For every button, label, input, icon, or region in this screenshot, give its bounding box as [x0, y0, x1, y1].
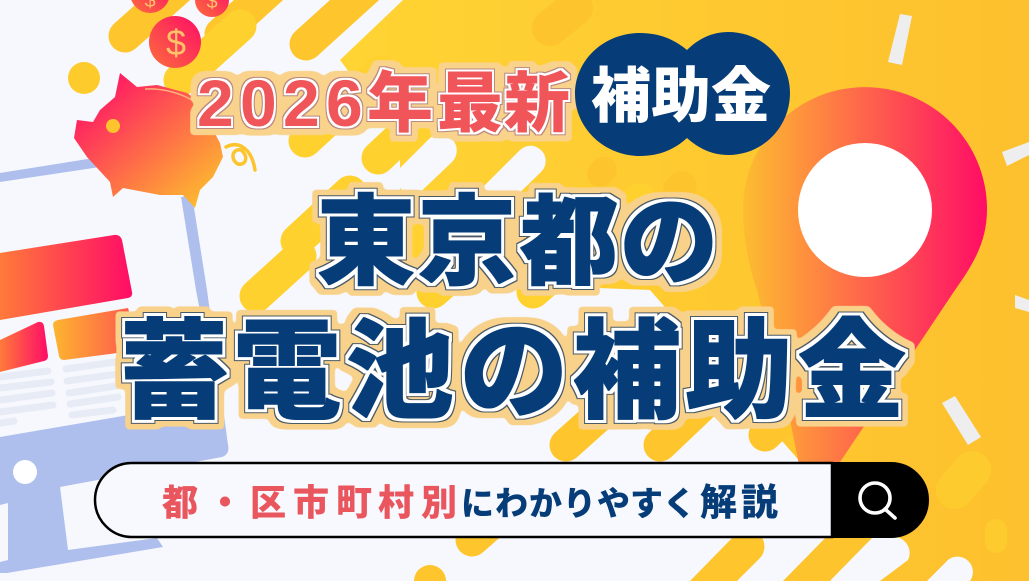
badge text: 補助金 — [591, 63, 771, 130]
map pin — [743, 87, 987, 510]
browser frame — [0, 158, 228, 573]
white window left — [0, 503, 8, 562]
badge: 補助金 — [575, 32, 790, 156]
browser mockup illustration — [0, 158, 228, 573]
red banner — [0, 235, 132, 320]
yellow stripe bottom right second — [783, 530, 880, 581]
subtle tone blobs on the field — [550, 8, 996, 542]
coin large: $ — [166, 22, 186, 63]
yellow diagonal field — [340, 0, 1029, 581]
small orange card — [53, 308, 140, 360]
yellow stripe at bottom centre — [414, 565, 446, 581]
heading: 2026年最新: 2026年最新 — [197, 66, 570, 140]
subtitle navy kanji: 解説 — [700, 482, 778, 523]
search bar — [95, 463, 928, 537]
coins — [130, 0, 229, 68]
white dot — [13, 460, 37, 484]
yellow stripes on light background — [125, 0, 830, 540]
title line 2: 蓄電池の補助金 — [120, 311, 906, 432]
confetti bars — [888, 14, 1029, 445]
search field — [95, 463, 832, 537]
subtitle navy: にわかりやすく — [461, 485, 696, 522]
text lines — [0, 362, 118, 423]
yellow stripe bottom right — [690, 530, 764, 581]
small red card — [0, 322, 48, 372]
yellow dot — [68, 62, 100, 94]
badge shape — [575, 32, 790, 156]
magnifier icon — [860, 483, 895, 518]
search button — [832, 463, 928, 537]
white stripes over yellow field — [390, 134, 973, 581]
subtitle red: 都・区市町村別 — [162, 482, 457, 523]
piggy bank icon — [74, 73, 255, 208]
title line 1: 東京都の — [317, 187, 718, 297]
